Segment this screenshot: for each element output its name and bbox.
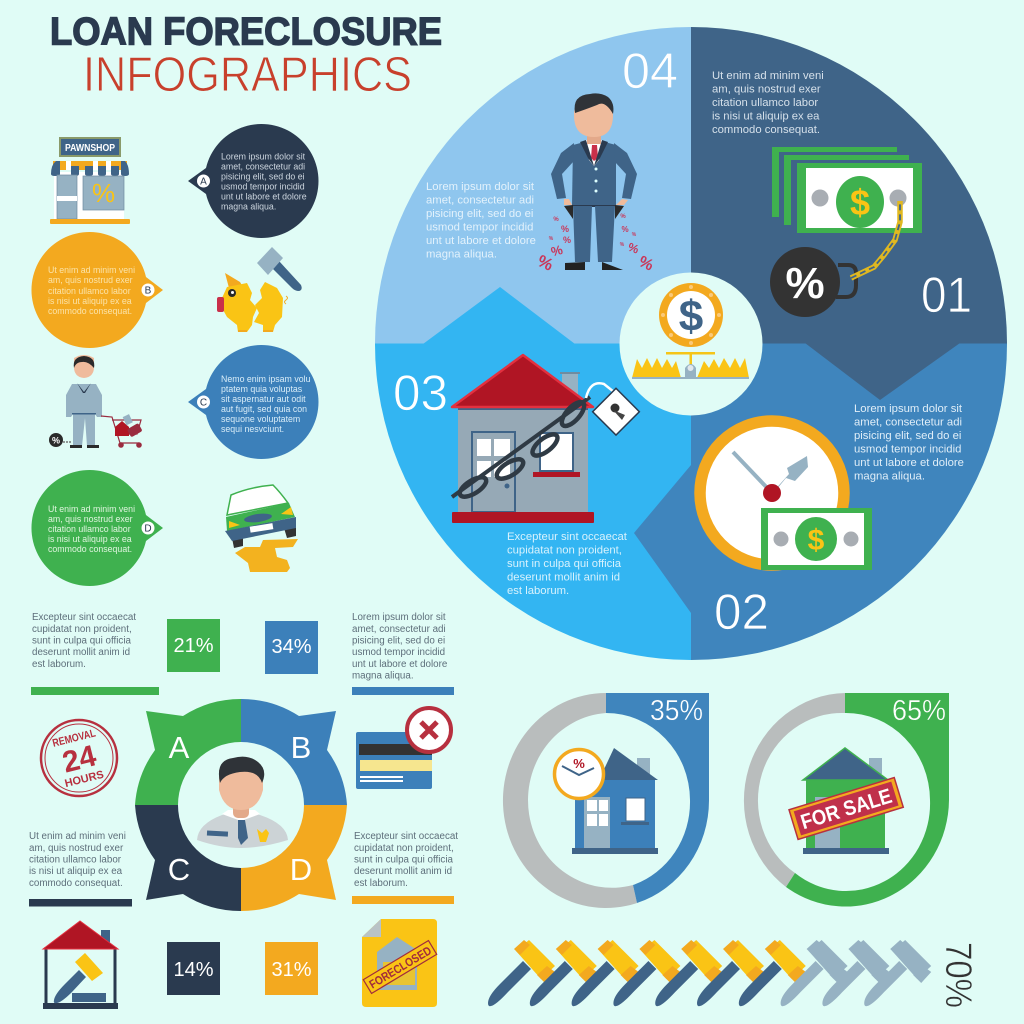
stat: 34%: 34% — [271, 636, 312, 658]
text block: 21% caption: cupidatat non proident, — [32, 624, 132, 635]
stat: 31%: 31% — [271, 959, 312, 981]
chart: 35% donut: 35% — [650, 695, 703, 727]
icon: money and ball and chain — [770, 147, 922, 317]
arrow: 03 into 04 — [423, 287, 575, 344]
bar: orange — [352, 896, 454, 904]
text block: 21% caption: sunt in culpa qui officia — [32, 636, 131, 646]
icon: blue house with clock — [554, 748, 658, 854]
stat: 70% rotated: 70% — [938, 942, 979, 1008]
hub circle — [620, 272, 762, 416]
text block: 02: unt ut labore et dolore — [854, 457, 964, 469]
icon: broke businessman: % — [534, 251, 556, 275]
panel: bubble B — [31, 232, 163, 348]
segment: 02 — [691, 344, 1007, 660]
panel: bubble B: citation ullamco labor — [48, 286, 131, 296]
icon: clock and banknote: $ — [808, 524, 825, 557]
panel: bubble B: B — [145, 286, 152, 296]
bar: green — [31, 687, 159, 695]
panel: bubble D: Ut enim ad minim veni — [48, 504, 135, 514]
text block: 21% caption: est laborum. — [32, 659, 86, 670]
text block: D caption: est laborum. — [354, 878, 408, 889]
icon: broke businessman: % — [620, 242, 625, 248]
chart: ABCD ring: B — [291, 730, 311, 765]
text block: 02: magna aliqua. — [854, 470, 925, 482]
panel: bubble D: am, quis nostrud exer — [48, 514, 133, 524]
number: 02: 02 — [714, 584, 769, 640]
text block: C caption: Ut enim ad minim veni — [29, 831, 126, 842]
chart: ABCD ring: D — [290, 852, 312, 887]
text block: 34% caption: amet, consectetur adi — [352, 624, 446, 635]
text block: 02: amet, consectetur adi — [854, 416, 962, 428]
icon: broke businessman: % — [632, 232, 637, 238]
panel: bubble A: magna aliqua. — [221, 202, 276, 212]
chart: 65% donut — [744, 693, 949, 907]
panel: bubble B: is nisi ut aliquip ex ea — [48, 296, 132, 306]
chart: ABCD ring — [135, 699, 347, 911]
text block: 34% caption: pisicing elit, sed do ei — [352, 636, 445, 646]
icon: removal 24 hours stamp: REMOVAL — [51, 727, 97, 750]
icon: removal 24 hours stamp: 24 — [59, 739, 100, 780]
icon: broke businessman: % — [626, 240, 641, 257]
text block: 02: usmod tempor incidid — [854, 444, 961, 456]
text block: C caption: is nisi ut aliquip ex ea — [29, 866, 123, 877]
chart: ABCD ring: A — [169, 730, 190, 765]
panel: bubble D: is nisi ut aliquip ex ea — [48, 534, 132, 544]
icon: car on coins — [225, 485, 298, 572]
panel: bubble C: sequi nesvciunt. — [221, 424, 284, 434]
panel: bubble B: Ut enim ad minim veni — [48, 265, 135, 275]
icon: money bait on spike trap: $ — [679, 292, 703, 341]
panel: bubble C: C — [200, 398, 207, 408]
text block: 34% caption: usmod tempor incidid — [352, 647, 445, 658]
stat: 14%: 14% — [173, 959, 214, 981]
chart: ABCD ring: C — [168, 852, 190, 887]
text block: 03: Excepteur sint occaecat — [507, 531, 628, 543]
icon: pawnshop: PAWNSHOP — [65, 142, 115, 154]
stat: 34% — [265, 621, 318, 674]
icon: blue house with clock: % — [573, 756, 585, 771]
text block: 02: Lorem ipsum dolor sit — [854, 403, 963, 415]
number: 01: 01 — [921, 267, 972, 323]
text block: 34% caption: magna aliqua. — [352, 670, 414, 682]
icon: bailiff — [197, 757, 288, 848]
panel: bubble C: aut fugit, sed quia con — [221, 404, 307, 414]
text block: 04: Lorem ipsum dolor sit — [426, 181, 535, 193]
text block: 34% caption: Lorem ipsum dolor sit — [352, 612, 446, 623]
text block: 01: commodo consequat. — [712, 124, 820, 136]
text block: 04: unt ut labore et dolore — [426, 235, 536, 247]
panel: bubble B: am, quis nostrud exer — [48, 275, 133, 285]
panel: bubble A: pisicing elit, sed do ei — [221, 172, 305, 182]
panel: bubble C: sit aspernatur aut odit — [221, 394, 306, 404]
title: LOAN FORECLOSURE — [50, 10, 442, 54]
icon: man with shopping cart and ball: % — [52, 436, 60, 446]
text block: 21% caption: deserunt mollit anim id — [32, 647, 130, 658]
icon: broke businessman: % — [563, 235, 571, 245]
title — [50, 10, 442, 102]
text block: 01: is nisi ut aliquip ex ea — [712, 110, 820, 122]
icon: broke businessman: % — [553, 217, 559, 223]
text block: D caption: Excepteur sint occaecat — [354, 831, 458, 842]
icon: gavel house — [43, 921, 118, 1009]
icon: broke businessman: % — [549, 236, 554, 242]
icon: house for sale — [789, 748, 903, 854]
text block: 04: pisicing elit, sed do ei — [426, 208, 533, 220]
panel: bubble D: D — [144, 524, 152, 534]
text block: 03: est laborum. — [507, 585, 569, 597]
icon: cancelled credit card — [356, 708, 451, 789]
text block: 04: usmod tempor incidid — [426, 222, 533, 234]
chart: big four-part circle — [375, 27, 1007, 660]
title: INFOGRAPHICS — [83, 48, 412, 102]
text block: 04: magna aliqua. — [426, 248, 497, 260]
icon: pawnshop — [50, 137, 130, 224]
text block: 02: pisicing elit, sed do ei — [854, 430, 961, 442]
icon: removal 24 hours stamp — [41, 720, 117, 796]
panel: bubble D: citation ullamco labor — [48, 524, 131, 534]
arrow: 01 into 02 — [805, 343, 960, 400]
icon: money and ball and chain: $ — [850, 182, 870, 223]
text block: 03: sunt in culpa qui officia — [507, 558, 622, 570]
bar: navy — [29, 899, 132, 906]
chart: 35% donut — [503, 693, 709, 908]
panel: bubble C: Nemo enim ipsam volu — [221, 374, 311, 384]
segment: 01 — [691, 27, 1007, 344]
segment: 03 — [375, 344, 691, 660]
text block: 01: citation ullamco labor — [712, 97, 818, 109]
chart: 65% donut: 65% — [892, 695, 946, 727]
panel: bubble A — [188, 124, 318, 238]
icon: house for sale: FOR SALE — [798, 785, 895, 834]
panel: bubble A: Lorem ipsum dolor sit — [221, 152, 306, 162]
icon: money bait on spike trap — [632, 283, 749, 379]
icon: removal 24 hours stamp: HOURS — [64, 769, 105, 790]
text block: 21% caption: Excepteur sint occaecat — [32, 612, 136, 623]
number: 03: 03 — [393, 365, 448, 421]
text block: C caption: commodo consequat. — [29, 878, 123, 889]
text block: 01: Ut enim ad minim veni — [712, 70, 824, 82]
icon: foreclosed document — [362, 919, 437, 1007]
text block: 34% caption: unt ut labore et dolore — [352, 659, 448, 670]
icon: man with shopping cart and ball — [49, 355, 143, 448]
panel: bubble B: commodo consequat. — [48, 306, 132, 316]
number: 04: 04 — [622, 43, 678, 99]
icon: broke businessman: % — [621, 225, 629, 234]
panel: bubble D: commodo consequat. — [48, 544, 132, 554]
bar: blue — [352, 687, 454, 695]
icon: clock and banknote — [700, 421, 872, 570]
icon: broke businessman: % — [549, 242, 565, 259]
text block: 04: amet, consectetur adi — [426, 194, 534, 206]
segment: 04 — [375, 27, 691, 344]
stat: 14% — [167, 942, 220, 995]
icon: piggy bank and hammer — [217, 247, 302, 332]
panel: bubble A: unt ut labore et dolore — [221, 192, 307, 202]
icon: foreclosed document: FORECLOSED — [367, 943, 434, 991]
panel: bubble C — [188, 345, 318, 459]
panel: bubble A: usmod tempor incidid — [221, 182, 305, 192]
text block: C caption: citation ullamco labor — [29, 854, 122, 866]
icon: house in chains with padlock — [452, 355, 639, 523]
panel: bubble D — [31, 470, 163, 586]
text block: 03: deserunt mollit anim id — [507, 572, 620, 584]
text block: D caption: sunt in culpa qui officia — [354, 854, 453, 866]
stat: 31% — [265, 942, 318, 995]
icon: pawnshop: % — [92, 178, 115, 208]
icon: broke businessman — [534, 93, 656, 275]
icon: broke businessman: % — [636, 253, 656, 275]
panel: bubble C: ptatem quia voluptas — [221, 384, 303, 394]
text block: D caption: deserunt mollit anim id — [354, 866, 452, 877]
panel: bubble A: amet, consectetur adi — [221, 162, 305, 172]
stat: 21% — [167, 619, 220, 672]
panel: bubble C: sequone voluptatem — [221, 414, 300, 424]
text block: D caption: cupidatat non proident, — [354, 843, 454, 854]
icon: broke businessman: % — [620, 214, 626, 220]
arrow: 02 into 03 — [634, 465, 691, 613]
text block: 01: am, quis nostrud exer — [712, 84, 821, 96]
stat: 21%: 21% — [173, 635, 214, 657]
icon: money and ball and chain: % — [785, 259, 825, 308]
text block: 03: cupidatat non proident, — [507, 544, 622, 556]
chart: gavel pictogram row — [488, 940, 931, 1006]
panel: bubble A: A — [200, 176, 207, 188]
text block: C caption: am, quis nostrud exer — [29, 843, 124, 854]
icon: broke businessman: % — [561, 224, 569, 234]
